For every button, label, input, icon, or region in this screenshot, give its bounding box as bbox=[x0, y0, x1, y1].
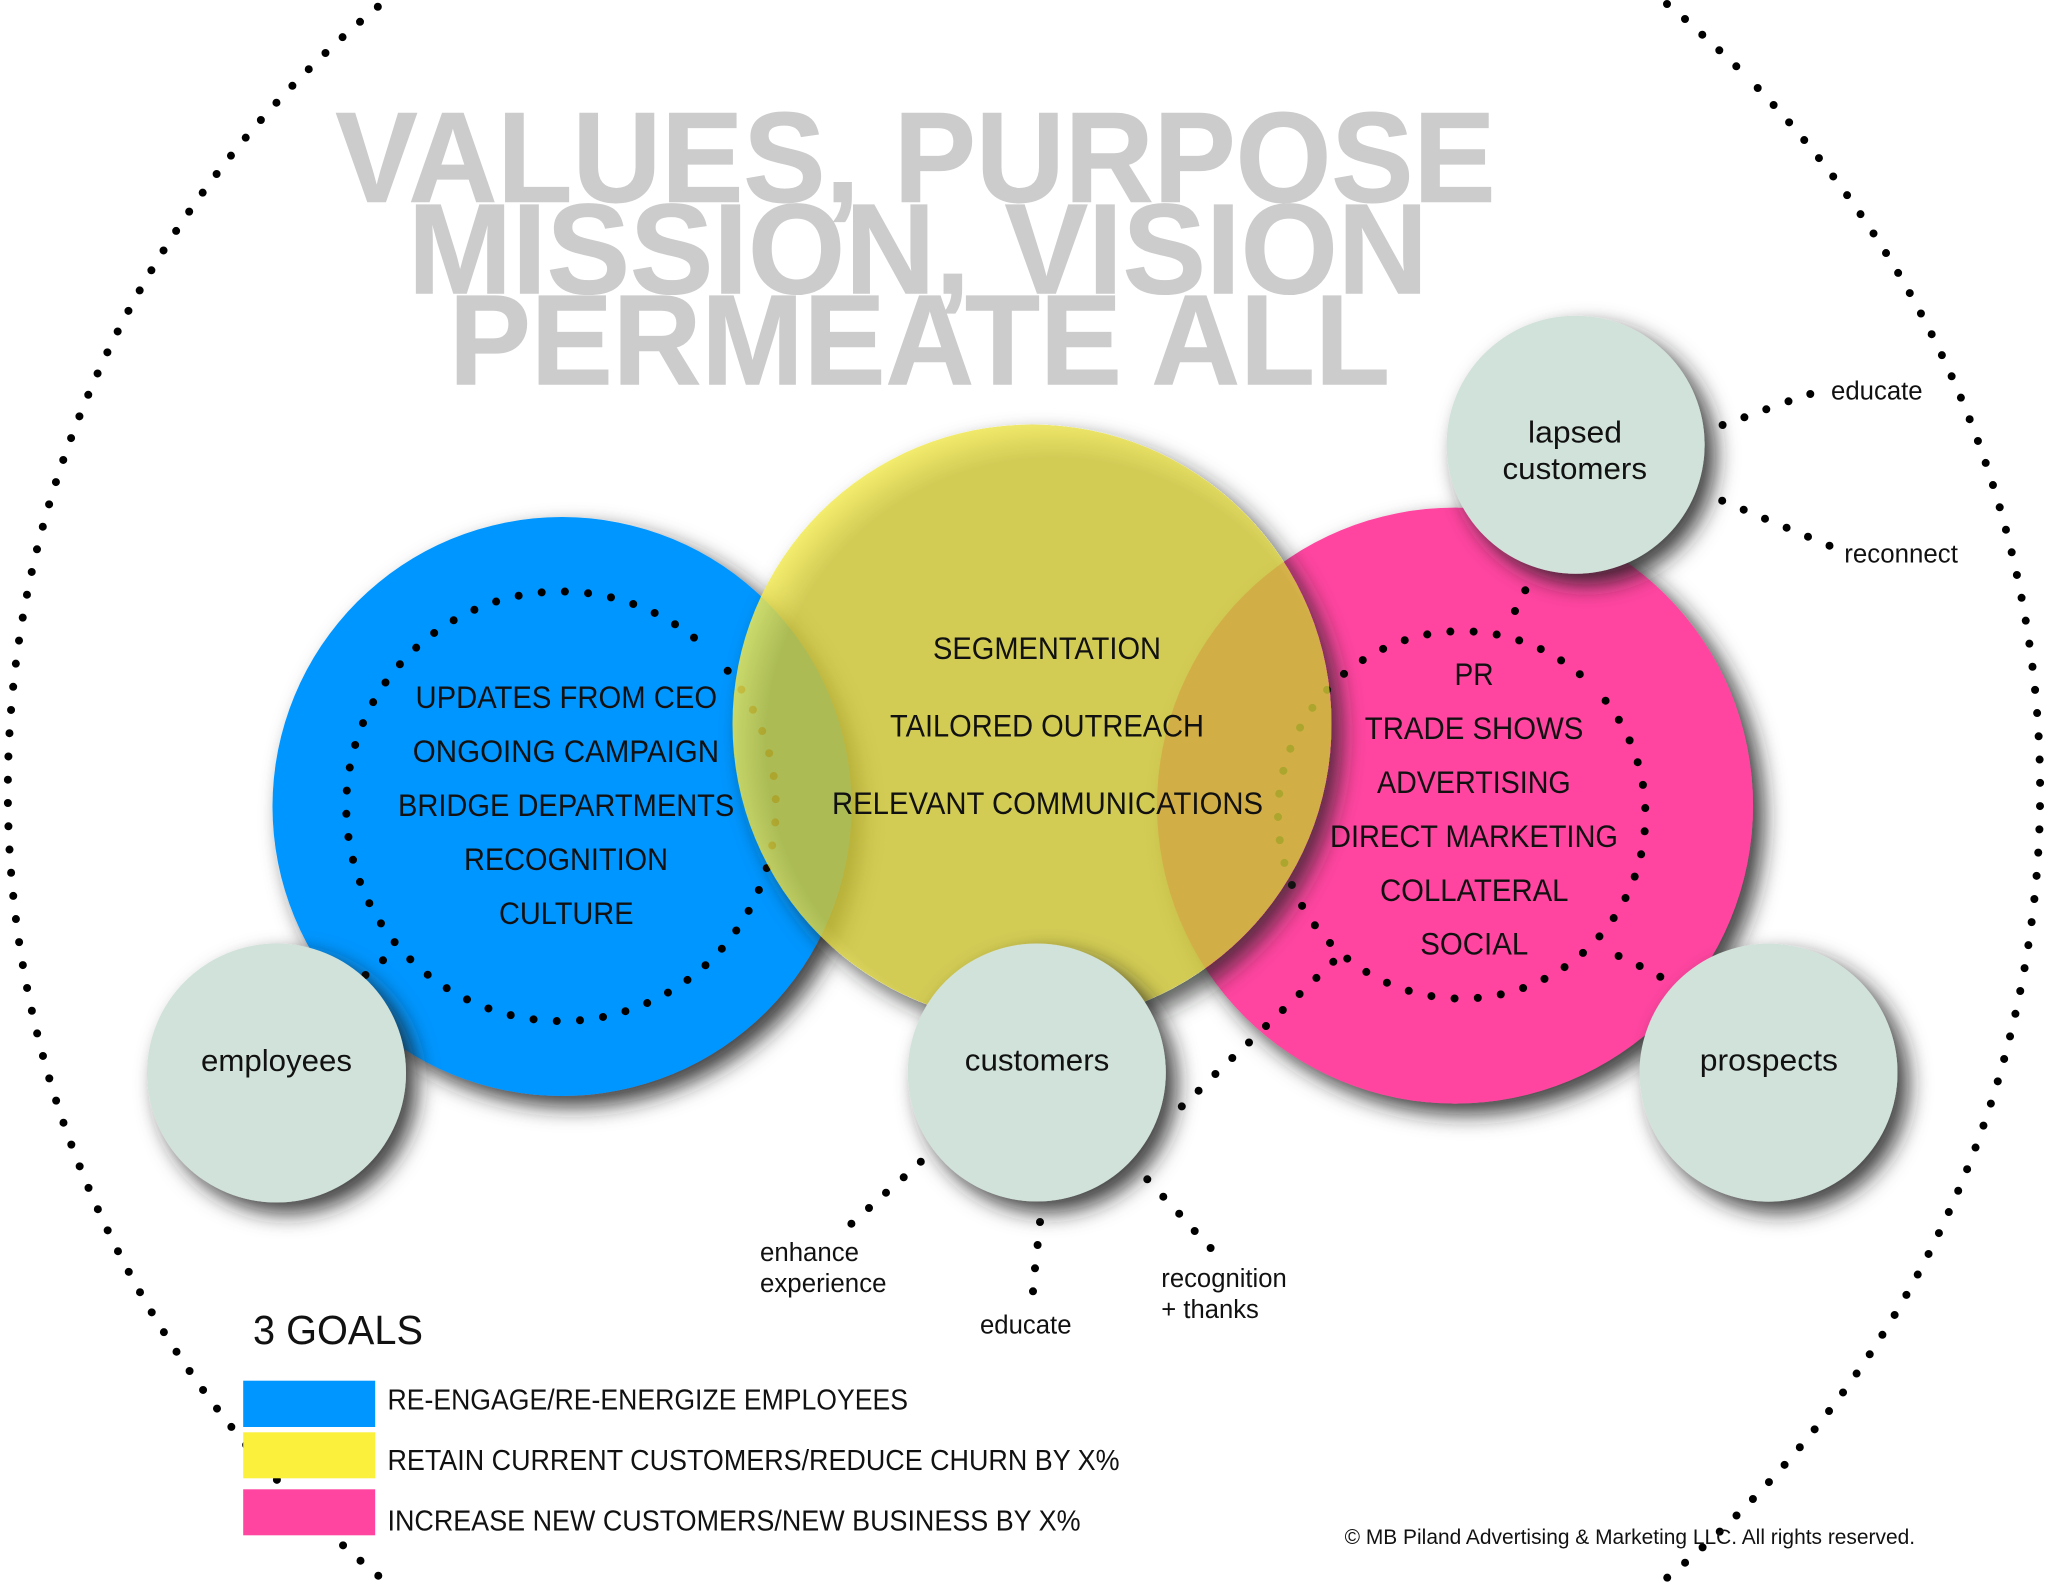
panel: yellow retention circle bbox=[732, 424, 1332, 1024]
label: recognition + thanks: recognition bbox=[1161, 1265, 1287, 1293]
connector: customers to enhance experience bbox=[851, 1162, 921, 1224]
text block: yellow circle items: TAILORED OUTREACH bbox=[890, 708, 1204, 744]
label: recognition + thanks: + thanks bbox=[1161, 1296, 1259, 1324]
text block: blue circle items: BRIDGE DEPARTMENTS bbox=[398, 787, 734, 823]
text block: pink circle items: TRADE SHOWS bbox=[1365, 710, 1583, 746]
audience circle: customers: customers bbox=[965, 1042, 1109, 1077]
copyright: © MB Piland Advertising & Marketing LLC. All rights reserved. bbox=[1345, 1525, 1915, 1549]
title: VALUES, PURPOSE bbox=[336, 87, 1496, 230]
text block: yellow circle items: SEGMENTATION bbox=[933, 630, 1161, 666]
panel: pink new business circle bbox=[1157, 508, 1753, 1104]
title: MISSION, VISION bbox=[408, 178, 1428, 321]
audience circle: customers bbox=[908, 944, 1166, 1202]
audience circle: lapsed customers bbox=[1447, 316, 1705, 574]
connector: lapsed customers to pink ring bbox=[1515, 590, 1525, 611]
text block: pink circle items: ADVERTISING bbox=[1377, 764, 1571, 800]
text block: pink circle items bbox=[1330, 656, 1618, 962]
title bbox=[336, 87, 1496, 412]
audience circle: prospects bbox=[1640, 944, 1898, 1202]
text block: yellow circle items bbox=[832, 630, 1263, 821]
legend heading: 3 GOALS bbox=[253, 1307, 423, 1353]
text block: yellow circle items: RELEVANT COMMUNICATIONS bbox=[832, 785, 1263, 821]
label: enhance experience bbox=[760, 1239, 886, 1298]
label: recognition + thanks bbox=[1161, 1265, 1287, 1324]
audience circle: lapsed customers: customers bbox=[1502, 451, 1647, 486]
connector: customers to educate bbox=[1033, 1222, 1040, 1291]
text block: pink circle items: SOCIAL bbox=[1420, 926, 1528, 962]
label: enhance experience: enhance bbox=[760, 1239, 859, 1267]
label: reconnect: reconnect bbox=[1844, 540, 1958, 568]
text block: pink circle items: DIRECT MARKETING bbox=[1330, 818, 1618, 854]
label: enhance experience: experience bbox=[760, 1270, 886, 1298]
title: PERMEATE ALL bbox=[449, 269, 1390, 412]
legend row: yellow goal: RETAIN CURRENT CUSTOMERS/REDUCE CHURN BY X% bbox=[388, 1445, 1120, 1477]
connector: customers to pink ring bbox=[1182, 962, 1333, 1106]
text block: blue circle items bbox=[398, 679, 734, 931]
text block: blue circle items: UPDATES FROM CEO bbox=[416, 679, 717, 715]
legend row: blue goal bbox=[243, 1381, 908, 1427]
legend row: blue goal: RE-ENGAGE/RE-ENERGIZE EMPLOYEES bbox=[388, 1384, 908, 1416]
connector: lapsed to educate bbox=[1723, 394, 1810, 425]
audience circle: employees: employees bbox=[201, 1043, 352, 1078]
text block: blue circle items: RECOGNITION bbox=[464, 841, 668, 877]
text block: blue circle items: ONGOING CAMPAIGN bbox=[413, 733, 719, 769]
legend row: pink goal: INCREASE NEW CUSTOMERS/NEW BUSINESS BY X% bbox=[388, 1506, 1080, 1538]
connector: lapsed to reconnect bbox=[1722, 501, 1830, 546]
text block: blue circle items: CULTURE bbox=[499, 895, 634, 931]
pink inner dotted circle bbox=[1278, 631, 1645, 999]
panel: blue employee circle bbox=[272, 517, 852, 1096]
text block: pink circle items: COLLATERAL bbox=[1380, 872, 1568, 908]
audience circle: employees bbox=[147, 944, 406, 1202]
legend: 3 goals bbox=[243, 1307, 1119, 1538]
audience circle: prospects: prospects bbox=[1700, 1042, 1838, 1078]
legend row: yellow goal bbox=[243, 1432, 1119, 1478]
label: educate (customers): educate bbox=[980, 1312, 1072, 1340]
text block: pink circle items: PR bbox=[1454, 656, 1494, 692]
blue inner dotted circle bbox=[346, 591, 776, 1021]
connector: customers to recognition bbox=[1147, 1179, 1211, 1248]
legend row: pink goal bbox=[243, 1489, 1080, 1538]
connector: employees to blue ring bbox=[366, 960, 383, 975]
connector: prospects to pink ring bbox=[1619, 956, 1681, 987]
label: educate (lapsed): educate bbox=[1831, 378, 1923, 406]
audience circle: lapsed customers: lapsed bbox=[1528, 415, 1622, 450]
